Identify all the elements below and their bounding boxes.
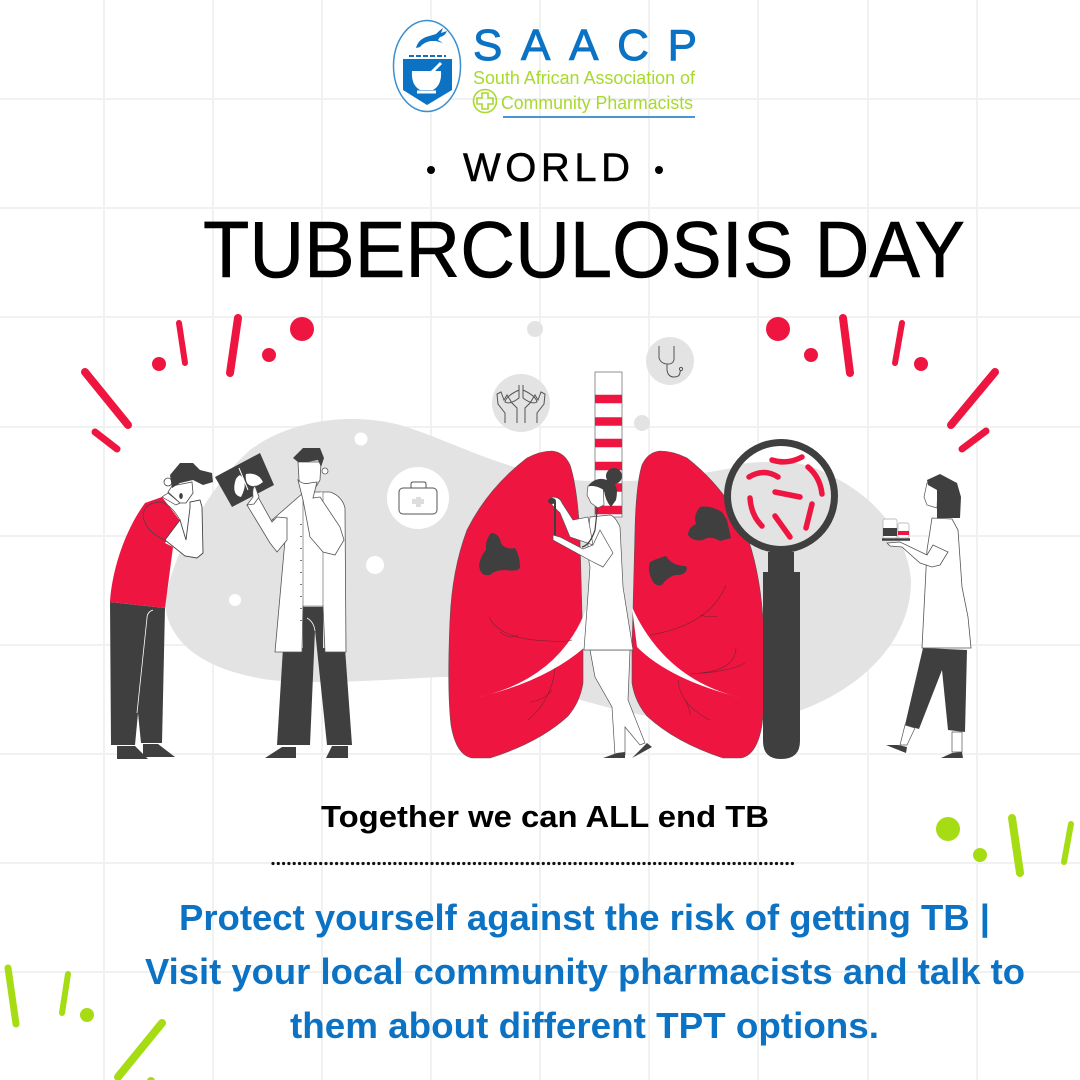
confetti: red left (85, 317, 314, 449)
icon: hands holding lungs (492, 374, 550, 432)
illustration background blob (165, 419, 911, 723)
trachea (595, 372, 622, 517)
message text (145, 897, 1025, 1046)
bacteria (749, 457, 822, 537)
coat (922, 518, 971, 648)
trousers (277, 607, 352, 745)
handle (763, 552, 800, 759)
head (298, 462, 321, 490)
left lung (449, 451, 583, 758)
icon: green cross (474, 90, 496, 112)
title: TUBERCULOSIS DAY (203, 205, 965, 294)
figure: doctor with x-ray (215, 448, 352, 758)
magnifying glass with bacteria (725, 440, 835, 759)
arm (887, 542, 948, 567)
figure: coughing man (110, 463, 213, 759)
x-ray film (215, 453, 274, 507)
coat (272, 492, 346, 652)
head (587, 484, 604, 508)
upper arm (552, 497, 593, 545)
logo: SAACP (394, 20, 697, 117)
airway veins (489, 585, 745, 720)
lungs (449, 451, 764, 758)
folded arm (298, 480, 344, 555)
head (168, 482, 193, 503)
trousers (110, 602, 165, 745)
confetti: green left (8, 968, 162, 1080)
right lung (632, 451, 764, 758)
wordmark: SAACP (473, 21, 697, 70)
lens (728, 443, 834, 549)
tagline: Together we can ALL end TB (321, 799, 769, 834)
lesions (479, 507, 731, 585)
figure: pharmacist with medicines (882, 474, 971, 758)
message text: Protect yourself against the risk of getting TB | (179, 897, 990, 939)
confetti: green right (936, 817, 1071, 873)
shirt (110, 497, 181, 608)
raised arm (247, 495, 287, 552)
organisation name line 1: South African Association of (473, 68, 696, 88)
heading: WORLD: WORLD (463, 146, 630, 190)
dress (584, 515, 633, 650)
bronchi (475, 607, 587, 698)
head (924, 483, 938, 508)
message text: them about different TPT options. (290, 1005, 879, 1046)
organisation name line 2: Community Pharmacists (501, 93, 693, 113)
arm (165, 500, 203, 558)
lower arm (553, 530, 613, 567)
legs (590, 650, 645, 755)
icon: stethoscope (646, 337, 694, 385)
icon: medical kit (387, 467, 449, 529)
message text: Visit your local community pharmacists and talk to (145, 951, 1025, 992)
trousers (905, 648, 967, 732)
stethoscope (548, 498, 598, 547)
icon: crest (394, 20, 460, 112)
decorative circles (229, 321, 650, 606)
medicine bottles (882, 519, 910, 540)
figure: nurse with stethoscope (548, 468, 652, 758)
confetti: red right (766, 317, 995, 449)
